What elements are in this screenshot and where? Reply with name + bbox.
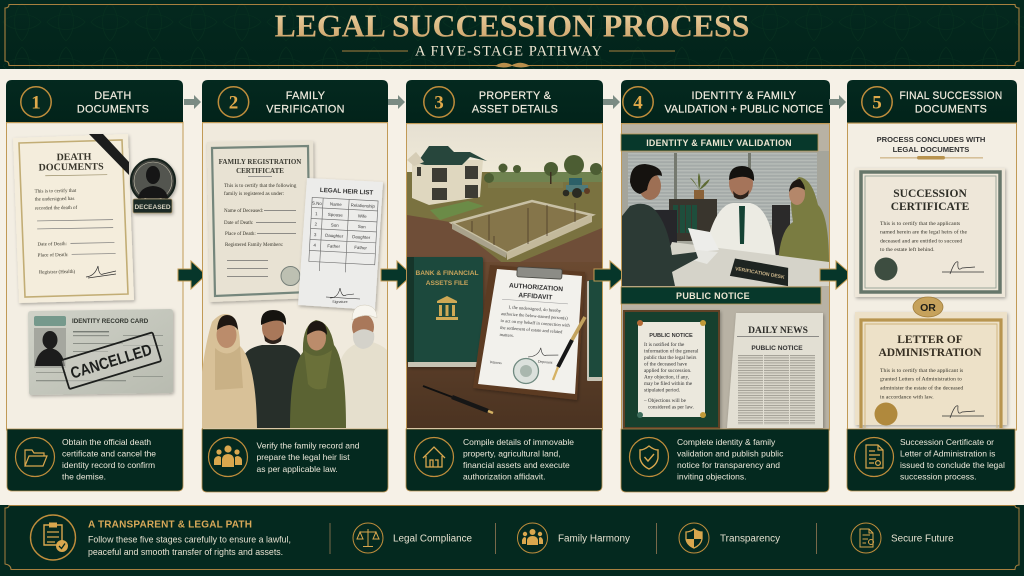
identity and family validation banner (621, 134, 818, 151)
divider (816, 523, 817, 554)
legal heir list: Wife (358, 213, 367, 219)
legal heir list: LEGAL HEIR LIST (320, 187, 374, 197)
person: young man (243, 310, 302, 428)
succession certificate: to the estate left behind. (880, 246, 935, 253)
panel 4 header: VALIDATION + PUBLIC NOTICE (664, 104, 824, 116)
death certificate: Date of Death: (37, 242, 67, 248)
arrow: 1 to 2 large (178, 261, 206, 289)
panel 4: identity and family validation (621, 80, 830, 492)
death certificate: recorded the death of (35, 206, 78, 212)
panel 2 header: 2 (229, 92, 238, 114)
path summary (30, 515, 291, 560)
panel 3 footer: financial assets and execute (463, 460, 570, 470)
notice board: It is notified for the (644, 341, 685, 348)
legal heir list: Spouse (328, 212, 343, 218)
value: transparency: Transparency (720, 534, 780, 544)
legal heir list: S.No (312, 200, 322, 206)
panel 5 footer: Letter of Administration is (900, 448, 995, 458)
legal heir list: Signature (332, 300, 348, 304)
divider (495, 523, 496, 554)
official at desk (705, 166, 776, 258)
value: family harmony (518, 523, 630, 553)
panel 5 header: DOCUMENTS (915, 104, 987, 116)
legal heir list: 4 (313, 243, 317, 248)
authorization affidavit clipboard: Deponent (538, 360, 554, 365)
seal (514, 358, 538, 384)
divider (330, 523, 331, 554)
panel 4 footer: Complete identity & family (677, 437, 776, 447)
authorization affidavit clipboard (473, 265, 585, 400)
value: family harmony: Family Harmony (558, 534, 630, 544)
death certificate: This is to certify that (35, 189, 77, 195)
daily news newspaper: DAILY NEWS (748, 326, 808, 336)
documents on desk (688, 228, 719, 264)
panel 3 header: PROPERTY & (479, 90, 552, 102)
pen on desk (423, 386, 493, 413)
panel 1 footer: identity record to confirm (62, 460, 155, 470)
woman at desk (772, 177, 829, 265)
panel 3 footer: property, agricultural land, (463, 448, 561, 458)
family photo (202, 305, 387, 428)
panel 1 header (6, 80, 183, 123)
family registration certificate: Registered Family Members: (225, 243, 283, 248)
value: transparency (679, 523, 780, 553)
verification desk nameplate: VERIFICATION DESK (734, 266, 785, 281)
notice board: stipulated period. (644, 388, 680, 394)
icon: scales (357, 529, 379, 546)
daily news newspaper: PUBLIC NOTICE (751, 345, 803, 352)
panel 4 header: IDENTITY & FAMILY (692, 90, 796, 102)
letter of administration: granted Letters of Administration to (880, 376, 962, 382)
authorization affidavit clipboard: I, the undersigned, do hereby (508, 304, 562, 314)
death certificate: the undersigned has (35, 197, 74, 203)
monitor (649, 210, 677, 246)
panel 3 footer: Compile details of immovable (463, 437, 574, 447)
notice board: of the deceased have (644, 360, 688, 368)
bank and financial assets file: BANK & FINANCIAL (415, 270, 479, 277)
family registration certificate: family is registered as under: (224, 190, 285, 197)
panel 2 footer: prepare the legal heir list (256, 452, 350, 462)
person: woman in beige scarf (202, 314, 257, 428)
legal heir list: 1 (315, 211, 318, 216)
subtitle rule right (609, 50, 675, 52)
arrow: 2 to 3 small (388, 95, 405, 109)
person: elderly man (340, 305, 387, 428)
panel 5 footer: succession process. (900, 472, 977, 482)
conclusion caption (877, 135, 985, 160)
daily news newspaper (727, 313, 823, 428)
public notice banner: PUBLIC NOTICE (676, 291, 750, 301)
arrow: 2 to 3 large (381, 261, 412, 289)
legal heir list: 3 (314, 232, 317, 237)
family registration certificate (207, 141, 315, 302)
panel 2: family verification (202, 80, 388, 492)
panel 5 footer (847, 429, 1015, 491)
panel 2 header (202, 80, 388, 123)
conclusion caption: LEGAL DOCUMENTS (893, 145, 969, 154)
icon: house (423, 447, 445, 467)
notice board: information of the general (644, 348, 699, 354)
notice board: applied for succession. (644, 367, 691, 374)
family registration certificate: This is to certify that the following (224, 182, 297, 189)
panel 2 header: FAMILY (286, 90, 325, 102)
arrow: 3 to 4 large (594, 261, 626, 289)
panel 5: final succession documents (847, 80, 1017, 491)
identity record card (28, 309, 173, 395)
property landscape (407, 125, 602, 267)
legal heir list (298, 178, 383, 310)
panel 1 footer: the demise. (62, 472, 106, 482)
succession certificate: named herein are the legal heirs of the (880, 228, 967, 236)
authorization affidavit clipboard: Witness (490, 360, 502, 365)
letter of administration: This is to certify that the applicant is (880, 367, 964, 374)
trees (484, 155, 602, 184)
arrow: 3 to 4 small (603, 95, 620, 109)
panel 3: property and asset details (406, 80, 603, 491)
house (407, 146, 487, 220)
subtitle: A FIVE-STAGE PATHWAY (415, 44, 603, 60)
path summary: A TRANSPARENT & LEGAL PATH (88, 520, 252, 530)
authorization affidavit clipboard: AFFIDAVIT (518, 292, 553, 301)
subtitle rule left (342, 50, 408, 52)
icon: bank (436, 296, 458, 320)
icon: family (522, 529, 543, 545)
man from behind (622, 164, 698, 286)
right file edge (587, 280, 602, 381)
panel 2 footer: as per applicable law. (256, 464, 338, 474)
path summary: peaceful and smooth transfer of rights and assets. (88, 547, 283, 557)
panel 1 header: DOCUMENTS (77, 104, 149, 116)
panel 2 header: VERIFICATION (266, 104, 345, 116)
notice board: Any objection, if any, (644, 374, 689, 380)
death certificate (13, 134, 134, 303)
legal heir list: Son (358, 224, 366, 229)
panel 4 footer: notice for transparency and (677, 460, 780, 470)
legal heir list: Daughter (325, 233, 344, 239)
panel 1 footer: certificate and cancel the (62, 448, 156, 458)
seal (874, 402, 898, 426)
desk (622, 242, 829, 286)
legal heir list: Daughter (352, 234, 371, 240)
family registration certificate: CERTIFICATE (236, 167, 284, 175)
panel 2 footer (202, 429, 388, 492)
letter of administration: administer the estate of the deceased (880, 384, 963, 392)
panel 1 header: DEATH (94, 90, 132, 102)
pen on clipboard (553, 317, 585, 380)
conclusion caption: PROCESS CONCLUDES WITH (877, 135, 985, 144)
value: secure future: Secure Future (891, 534, 954, 544)
cancelled stamp (61, 332, 161, 389)
notice board: PUBLIC NOTICE (649, 333, 693, 339)
bank and financial assets file (407, 257, 483, 367)
succession certificate: This is to certify that the applicants (880, 220, 961, 227)
path summary: Follow these five stages carefully to ensure a lawful, (88, 534, 291, 544)
header banner (0, 0, 1024, 69)
icon: clipboard check (44, 522, 68, 552)
value: secure future (851, 523, 954, 553)
notice board: public that the legal heirs (644, 355, 696, 361)
arrow: 1 to 2 small (184, 95, 201, 109)
icon: shield (686, 529, 702, 548)
panel 2 footer: Verify the family record and (256, 440, 360, 450)
death certificate: Registrar (Health) (39, 270, 76, 276)
arrow: 4 to 5 large (820, 261, 852, 289)
panel 4 footer: inviting objections. (677, 472, 746, 482)
panel 4 header (621, 80, 830, 124)
seal (874, 258, 898, 280)
ornament (495, 63, 530, 68)
family registration certificate: Name of Deceased: (224, 209, 263, 214)
notice board (624, 311, 719, 428)
panel 3 header: ASSET DETAILS (472, 104, 558, 116)
icon: shield (640, 446, 658, 469)
tractor (563, 178, 590, 198)
family registration certificate: Place of Death: (225, 232, 256, 237)
office scene (622, 151, 829, 286)
panel 5 footer: Succession Certificate or (900, 437, 994, 447)
panel 4 header: 4 (633, 92, 643, 114)
fenced plot (452, 201, 592, 260)
icon: family (214, 445, 242, 467)
authorization affidavit clipboard: authorize the below-named person(s) (501, 311, 568, 321)
bottom banner (0, 505, 1024, 576)
panel 5 header: 5 (872, 92, 882, 114)
panel 4 footer: validation and publish public (677, 448, 784, 458)
deceased badge: DECEASED (134, 204, 171, 211)
legal heir list: 2 (314, 222, 318, 227)
legal heir list: Father (327, 243, 341, 249)
arrow: 4 to 5 small (829, 95, 846, 109)
succession certificate: SUCCESSION (893, 188, 967, 200)
cancelled stamp: CANCELLED (69, 342, 154, 383)
death certificate: DOCUMENTS (39, 161, 104, 174)
identity and family validation banner: IDENTITY & FAMILY VALIDATION (646, 138, 792, 148)
panel 3 header (406, 80, 603, 124)
value: legal compliance: Legal Compliance (393, 534, 473, 544)
death certificate: Place of Death: (38, 253, 69, 259)
authorization affidavit clipboard: matters. (499, 332, 514, 338)
or badge (913, 297, 943, 317)
person: woman in olive scarf (290, 320, 346, 428)
panel 3 footer (406, 429, 602, 491)
legal heir list: Father (354, 245, 368, 250)
panel 1 footer: Obtain the official death (62, 437, 151, 447)
value: legal compliance (353, 523, 473, 553)
verification desk nameplate (730, 258, 791, 286)
wooden table (407, 262, 602, 428)
panel 4 footer (621, 429, 829, 492)
authorization affidavit clipboard: the settlement of estate and related (500, 325, 563, 334)
family registration certificate: FAMILY REGISTRATION (219, 158, 301, 166)
family registration certificate: Date of Death: (224, 221, 253, 226)
legal heir list: Name (330, 201, 342, 207)
title: LEGAL SUCCESSION PROCESS (274, 8, 750, 44)
deceased badge (131, 159, 175, 213)
divider (656, 523, 657, 554)
icon: document (866, 445, 883, 468)
panel 1 header: 1 (31, 92, 41, 114)
notice board: – Objections will be (643, 398, 687, 404)
authorization affidavit clipboard: to act on my behalf in connection with (500, 318, 571, 328)
legal heir list: Relationship (351, 203, 376, 209)
panel 5 header (847, 80, 1017, 124)
letter of administration: LETTER OF (897, 334, 963, 346)
notice board: may be filed within the (644, 380, 693, 387)
letter of administration (855, 312, 1007, 428)
panel 3 footer: authorization affidavit. (463, 472, 546, 482)
legal heir list: Son (331, 223, 339, 228)
icon: folder (25, 450, 47, 466)
panel 5 footer: issued to conclude the legal (900, 460, 1005, 470)
notice board: considered as per law. (648, 404, 694, 410)
identity record card: IDENTITY RECORD CARD (72, 318, 149, 325)
panel 1: death documents (6, 80, 183, 491)
panel 1 footer (7, 429, 183, 491)
bank and financial assets file: ASSETS FILE (426, 280, 469, 287)
panel 3 header: 3 (434, 92, 444, 114)
or badge: OR (920, 302, 936, 314)
icon: certificate (860, 529, 874, 547)
succession certificate (855, 168, 1005, 297)
succession certificate: deceased and are entitled to succeed (880, 238, 962, 244)
shelf with binders (669, 173, 717, 241)
panel 5 header: FINAL SUCCESSION (900, 90, 1002, 102)
letter of administration: ADMINISTRATION (878, 347, 982, 359)
succession certificate: CERTIFICATE (891, 201, 970, 213)
letter of administration: in accordance with law. (880, 394, 934, 400)
death certificate: DEATH (56, 152, 92, 163)
public notice banner (621, 287, 821, 304)
authorization affidavit clipboard: AUTHORIZATION (509, 282, 563, 293)
